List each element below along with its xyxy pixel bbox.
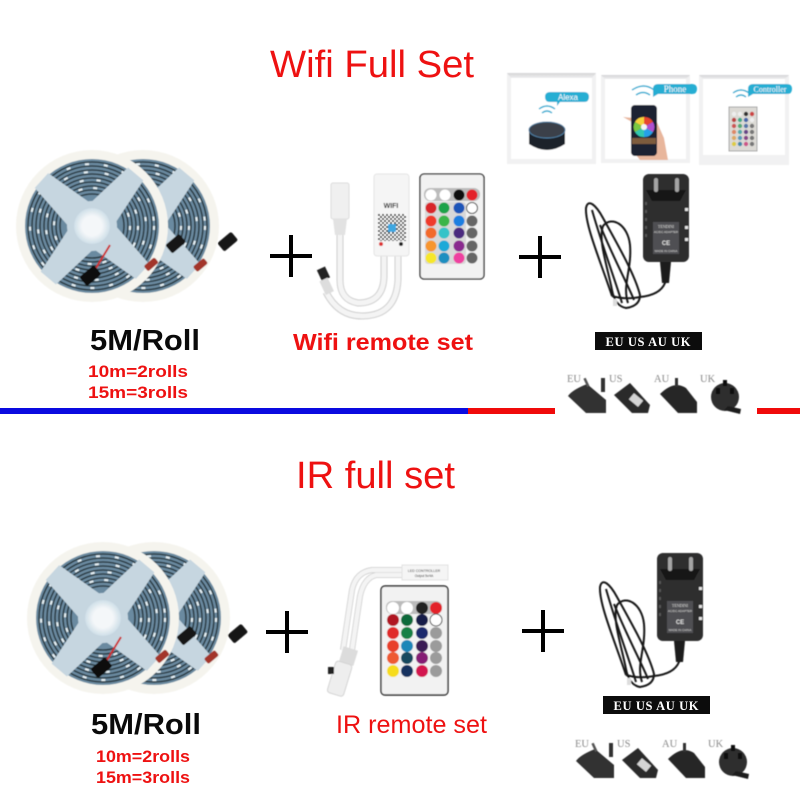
power adapter (bottom) [600,553,703,687]
IR controller: LED CONTROLLER [408,569,441,573]
caption: IR remote set: IR remote set [336,711,487,739]
panel: Phone [601,75,697,163]
title: Wifi Full Set: Wifi Full Set [270,44,474,86]
plug types (top) [567,374,741,414]
divider line [0,408,800,414]
title: IR full set: IR full set [296,455,455,497]
text: 15m=3rolls (top): 15m=3rolls [88,383,188,402]
icon: plus 1 [270,235,312,277]
icon: plus 2 [519,236,561,278]
panel: Alexa: Alexa [558,93,579,102]
text: 15m=3rolls (bottom): 15m=3rolls [96,768,190,787]
wifi controller [317,174,409,316]
plug region bar (top) [595,332,702,350]
IR controller [327,565,448,697]
icon: plus 3 [266,611,308,653]
plug types (bottom) [575,739,749,779]
LED strip rolls (top) [16,150,238,302]
panel: Controller: Controller [754,85,787,94]
panel: Alexa [507,73,596,164]
power adapter (top) [586,174,689,308]
LED strip rolls (bottom) [27,542,248,694]
heading: 5M/Roll (bottom): 5M/Roll [91,709,201,741]
text: 10m=2rolls (bottom): 10m=2rolls [96,747,190,766]
icon: plus 4 [522,610,564,652]
text: 10m=2rolls (top): 10m=2rolls [88,362,188,381]
caption: Wifi remote set: Wifi remote set [293,329,473,355]
wifi controller: WIFI [384,203,398,210]
remote control (IR set) [381,586,448,695]
IR controller: Output 5v/4A [415,574,434,578]
remote control (wifi set) [420,174,484,279]
panel: Controller [699,75,792,165]
plug region bar (bottom) [603,696,710,714]
plug region bar (bottom): EU US AU UK [614,699,699,713]
panel: app and voice control options [507,73,792,165]
panel: Phone: Phone [664,84,686,94]
plug region bar (top): EU US AU UK [606,335,691,349]
heading: 5M/Roll (top): 5M/Roll [90,325,200,357]
